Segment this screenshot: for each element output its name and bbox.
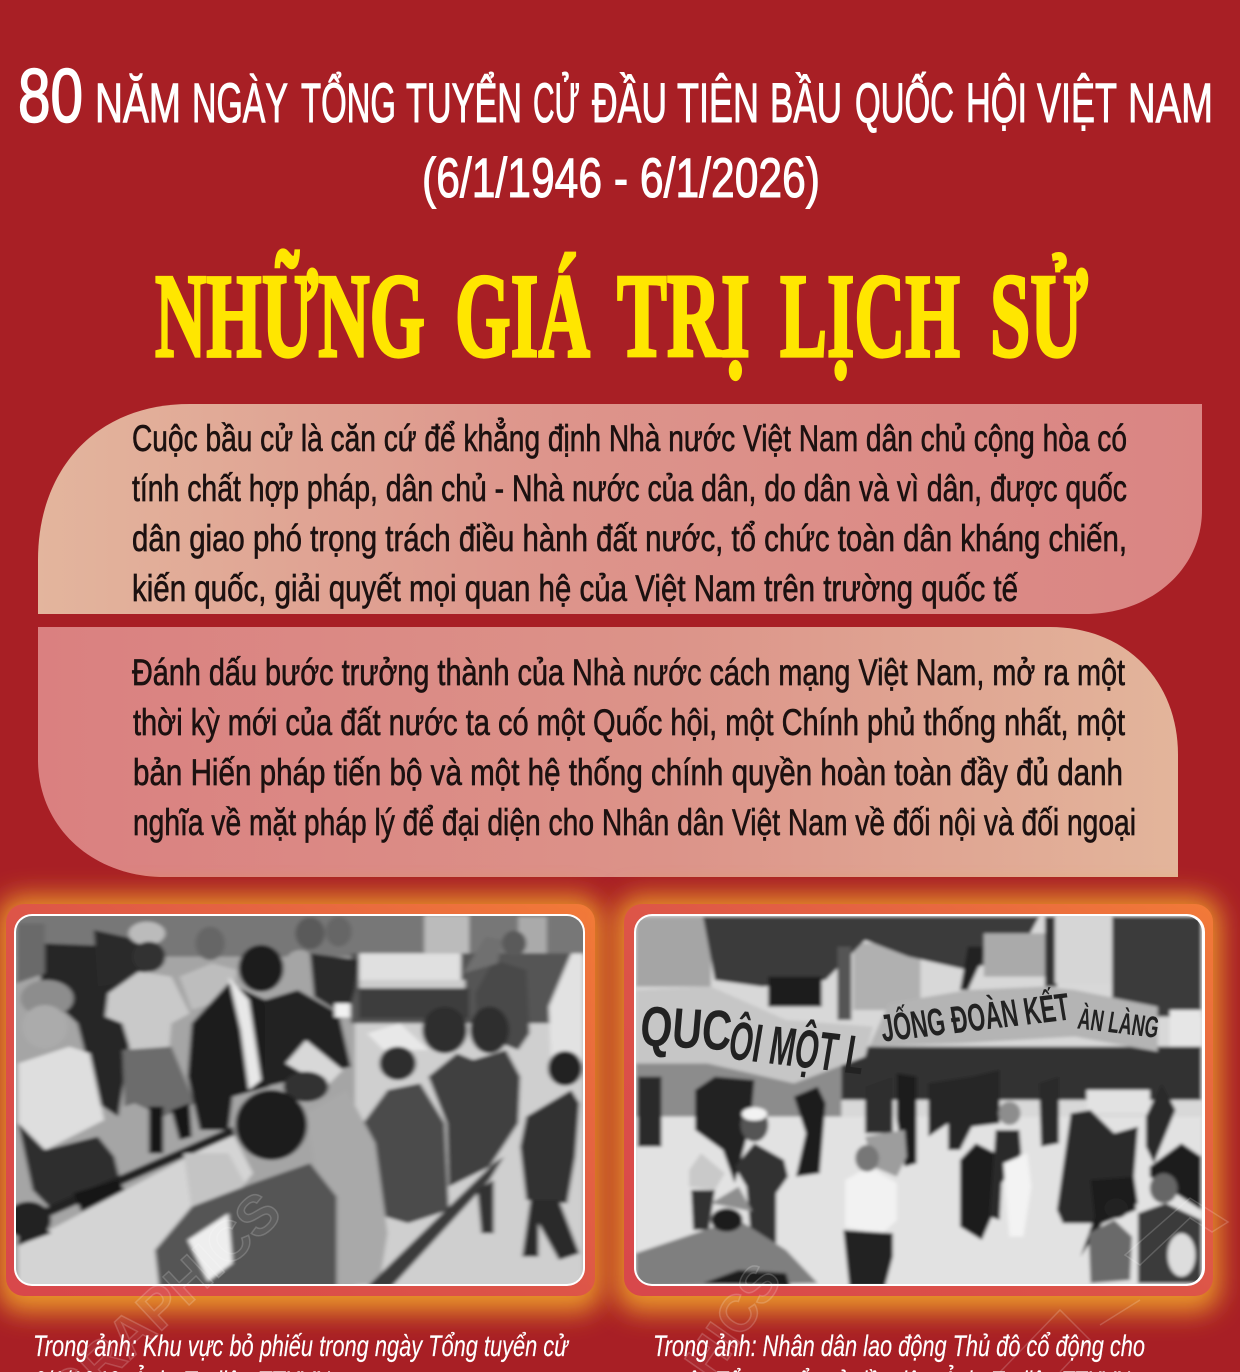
banner lettering: QUC <box>638 995 734 1063</box>
banner lettering: ÀN LÀNG <box>1075 1002 1161 1045</box>
caption: polling area: Trong ảnh: Khu vực bỏ phiếu trong ngày Tổng tuyển cử <box>33 1330 569 1363</box>
title line one: TIÊN <box>677 71 759 134</box>
main heading: SỬ <box>990 249 1088 382</box>
date range: (6/1/1946 - 6/1/2026) <box>422 146 820 209</box>
main heading: TRỊ <box>617 249 750 382</box>
banner lettering: ÔI MỘT L <box>725 1008 870 1086</box>
title line one: TUYỂN <box>406 71 522 134</box>
title line one: CỬ <box>533 71 580 134</box>
caption: polling area <box>33 1330 569 1372</box>
title line one: VIỆT <box>1037 71 1117 134</box>
title line one: QUỐC <box>855 71 954 134</box>
number 80: 80 <box>18 54 83 139</box>
photo: voting area <box>16 916 583 1284</box>
title line one: ĐẦU <box>592 71 667 134</box>
header: anniversary title <box>18 54 1213 209</box>
main heading: LỊCH <box>780 249 960 382</box>
watermark <box>33 1179 1228 1372</box>
title line one: TỔNG <box>301 71 396 134</box>
caption: banner march <box>653 1330 1145 1372</box>
panel: maturity of the revolutionary state <box>38 627 1178 877</box>
photo card: banner march <box>616 896 1237 1312</box>
main heading: GIÁ <box>455 249 590 382</box>
panel: legal democratic state <box>38 404 1202 614</box>
banner lettering <box>642 987 1158 1078</box>
main heading <box>155 248 1088 382</box>
photo: workers campaigning with banners <box>636 916 1202 1284</box>
main heading: NHỮNG <box>155 248 425 382</box>
banner lettering: JỐNG ĐOÀN KẾT <box>877 984 1073 1050</box>
title line one: BẦU <box>770 71 842 134</box>
title line one: HỘI <box>966 71 1027 134</box>
photo card: polling area <box>0 896 612 1312</box>
title line one: NGÀY <box>192 71 288 134</box>
panel: legal democratic state: kiến quốc, giải quyết mọi quan hệ của Việt Nam trên trường quốc tế <box>132 568 1018 609</box>
title line one <box>95 71 1213 134</box>
title line one: NĂM <box>95 71 181 134</box>
